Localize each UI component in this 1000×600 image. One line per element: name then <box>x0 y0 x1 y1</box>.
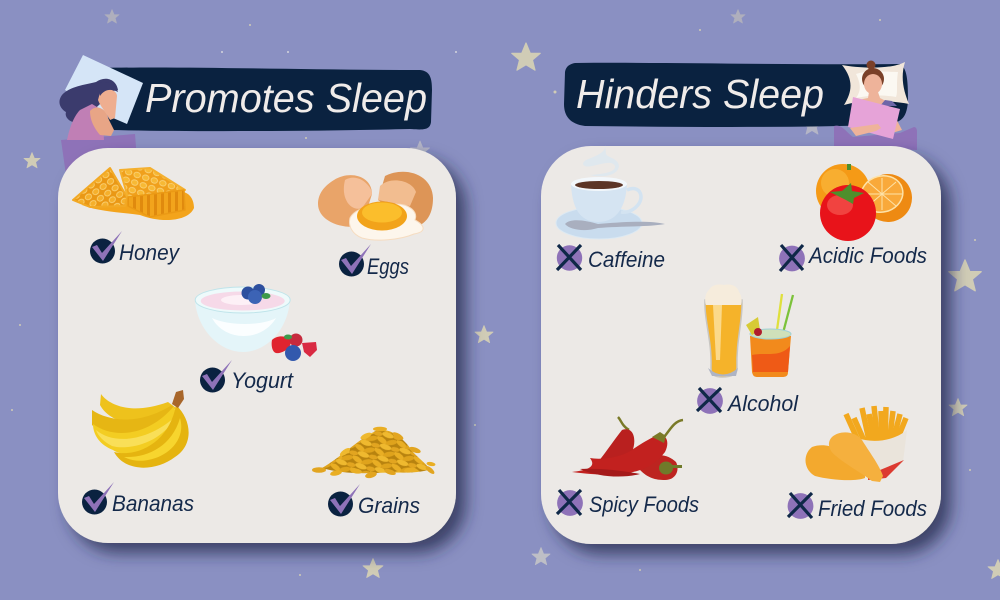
item: grains <box>328 484 420 518</box>
item: grains: Grains <box>358 493 420 518</box>
right title group <box>564 60 917 150</box>
icon: fried foods <box>806 406 907 482</box>
item: fried foods <box>788 493 927 521</box>
item: bananas: Bananas <box>112 491 194 516</box>
item: yogurt: Yogurt <box>231 368 294 393</box>
item: spicy foods <box>557 490 699 517</box>
icon: honey <box>73 168 194 220</box>
panel background right <box>541 146 941 544</box>
item: alcohol: Alcohol <box>726 391 799 416</box>
illustration: sleeping woman <box>59 55 143 175</box>
item: yogurt <box>200 360 294 393</box>
item: eggs: Eggs <box>367 254 409 279</box>
left title group <box>59 55 432 175</box>
icon: bananas <box>92 390 189 468</box>
icon: spicy foods <box>572 417 683 480</box>
panel: hinders sleep <box>541 145 941 544</box>
panel: promotes sleep <box>58 148 456 543</box>
item: eggs <box>339 244 409 279</box>
item: fried foods: Fried Foods <box>818 496 927 521</box>
item: honey: Honey <box>119 240 181 265</box>
panel background left <box>58 148 456 543</box>
title banner: hinders <box>564 63 908 127</box>
title: promotes sleep: Promotes Sleep <box>145 75 427 121</box>
icon: eggs <box>318 172 433 240</box>
title: hinders sleep: Hinders Sleep <box>576 71 824 117</box>
item: caffeine: Caffeine <box>588 247 665 272</box>
item: acidic foods <box>779 243 927 271</box>
icon: caffeine <box>556 145 665 239</box>
illustration: awake woman <box>834 60 917 150</box>
item: alcohol <box>697 388 799 416</box>
item: honey <box>90 231 181 265</box>
item: caffeine <box>557 245 665 272</box>
icon: acidic foods <box>816 164 919 241</box>
icon: yogurt <box>195 284 317 361</box>
icon: grains <box>312 427 436 479</box>
icon: alcohol <box>705 284 793 377</box>
item: acidic foods: Acidic Foods <box>807 243 927 268</box>
title banner: promotes <box>102 67 432 131</box>
item: bananas <box>82 482 194 516</box>
item: spicy foods: Spicy Foods <box>589 492 699 517</box>
